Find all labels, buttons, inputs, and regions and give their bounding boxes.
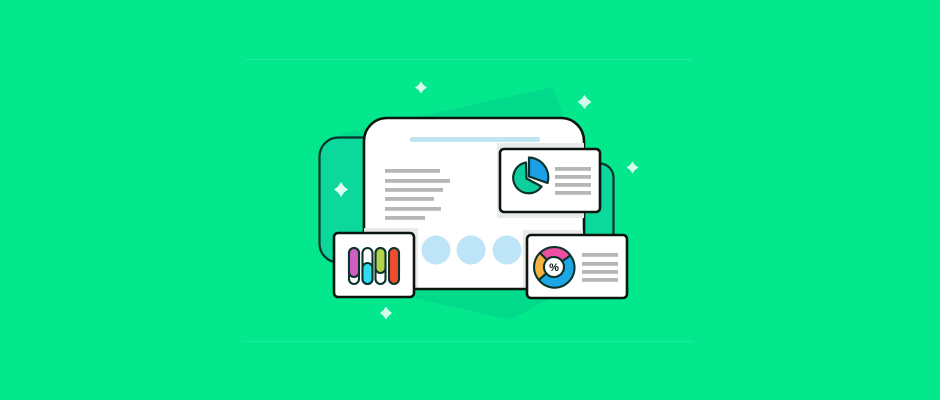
card shadows on main card [340,143,584,288]
legend lines [555,167,591,195]
pie chart [513,158,548,193]
heading bar [410,137,540,142]
background shape: dark green polygon [340,87,578,320]
panel: main white card [340,118,584,289]
sparkle: top right [578,95,592,109]
text block lines [385,169,450,220]
percent symbol: % [549,262,559,274]
panel: right teal back card [560,164,614,254]
sparkle: right [626,162,638,174]
card: pie chart [500,149,600,212]
panel: left teal back card [320,138,410,262]
bar: red [389,248,399,284]
card: donut chart [527,235,627,298]
three light blue circles [422,236,522,264]
bar: purple [349,248,359,284]
card: slider bars [334,233,414,297]
bar: cyan [362,248,372,284]
illustration: dashboard with charts on green background [245,59,693,342]
donut chart [534,247,575,288]
sparkle: top centre [415,82,427,94]
sparkle: left on teal card [334,182,348,197]
sparkle: bottom [380,306,392,320]
legend lines [582,253,618,282]
bar: lime [376,248,386,284]
